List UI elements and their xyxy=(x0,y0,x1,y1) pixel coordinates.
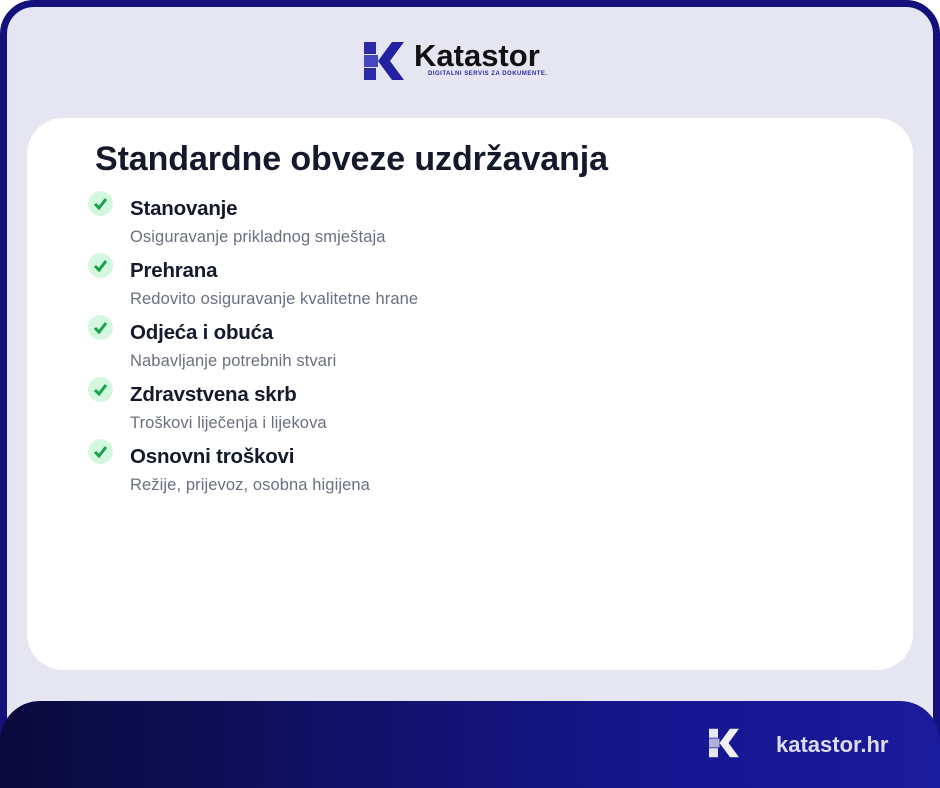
logo xyxy=(364,38,548,80)
icon: K logo xyxy=(364,42,404,80)
item: Stanovanje: Stanovanje xyxy=(130,197,237,220)
item: Stanovanje xyxy=(88,191,386,246)
item: Zdravstvena xyxy=(88,377,327,432)
footer url: katastor.hr xyxy=(776,732,888,757)
item: Osnovni: Osnovni troškovi xyxy=(130,445,294,468)
item: Odjeća xyxy=(88,315,336,370)
footer xyxy=(0,701,940,788)
item: Osnovni xyxy=(88,439,370,494)
item: Prehrana: Prehrana xyxy=(130,259,217,282)
logo: DIGITALNI SERVIS ZA DOKUMENTE. xyxy=(428,71,548,77)
item: Stanovanje: Osiguravanje prikladnog smještaja xyxy=(130,228,386,246)
item: Prehrana: Redovito osiguravanje kvalitetne hrane xyxy=(130,290,418,308)
item: Osnovni: Režije, prijevoz, osobna higijena xyxy=(130,476,370,494)
item: Zdravstvena: Zdravstvena skrb xyxy=(130,383,297,406)
icon: footer K xyxy=(709,728,739,758)
item: Odjeća: Nabavljanje potrebnih stvari xyxy=(130,352,336,370)
panel: card xyxy=(27,118,913,670)
item: Zdravstvena: Troškovi liječenja i lijekova xyxy=(130,414,327,432)
logo text: Katastor xyxy=(414,38,540,73)
item: Prehrana xyxy=(88,253,418,308)
item: Odjeća: Odjeća i obuća xyxy=(130,321,273,344)
title: Standardne obveze uzdržavanja xyxy=(95,140,608,178)
